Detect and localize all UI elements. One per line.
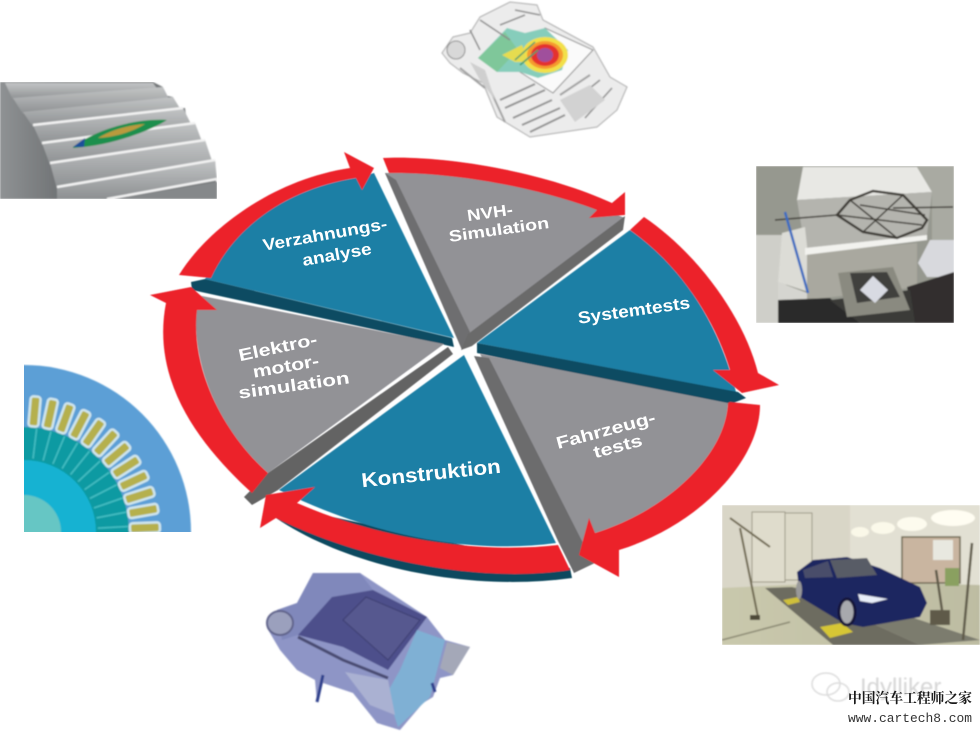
wheel labels: [237, 202, 691, 492]
image: electric drive unit 3D model: [267, 573, 470, 730]
wheel: six segment process cycle: [150, 152, 779, 582]
label: Fahrzeugtests: [554, 408, 658, 462]
label: Systemtests: Systemtests: [577, 293, 691, 328]
label: Fahrzeugtests: Fahrzeug-: [554, 408, 658, 453]
image: NVH simulation housing with heat map: [442, 2, 627, 137]
segment: Konstruktion: [279, 355, 556, 546]
arrow: Konstruktion to Elektromotorsimulation: [260, 487, 570, 574]
segment: Elektromotorsimulation: [196, 295, 453, 505]
image: stator and rotor cross-section: [24, 364, 192, 532]
watermark site name: 中国汽车工程师之家: [848, 690, 972, 706]
segment: Verzahnungsanalyse: [191, 173, 454, 347]
segment: NVH-Simulation: [385, 173, 625, 350]
base shadow under the wheel: [276, 510, 572, 582]
label: Verzahnungsanalyse: analyse: [301, 240, 373, 270]
watermark URL: www.cartech8.com: [848, 712, 972, 726]
image: vehicle test photo with blue car: [722, 505, 980, 645]
arrow: Fahrzeugtests to Konstruktion: [579, 402, 760, 577]
arrow: Elektromotorsimulation to Verzahnungsanalyse: [150, 287, 268, 493]
label: NVH-Simulation: [448, 202, 550, 246]
watermark: [812, 673, 972, 726]
label: NVH-Simulation: Simulation: [448, 215, 550, 246]
label: Elektromotorsimulation: Elektro-: [237, 330, 319, 365]
label: Konstruktion: Konstruktion: [360, 456, 502, 492]
watermark handle: Idylliker: [860, 674, 941, 701]
image: system test rig photo: [756, 166, 954, 323]
arrow: Systemtests to Fahrzeugtests: [630, 217, 779, 393]
arrow: NVH-Simulation to Systemtests: [383, 158, 625, 218]
image: gear tooth contact analysis: [0, 82, 217, 199]
arrow: Verzahnungsanalyse to NVH-Simulation: [179, 152, 374, 278]
label: Fahrzeugtests: tests: [591, 431, 644, 462]
label: Verzahnungsanalyse: Verzahnungs-: [261, 215, 389, 255]
label: Elektromotorsimulation: [237, 330, 351, 403]
segment: Fahrzeugtests: [474, 354, 728, 573]
label: Elektromotorsimulation: motor-: [251, 351, 321, 382]
label: Verzahnungsanalyse: [261, 215, 389, 270]
label: NVH-Simulation: NVH-: [466, 202, 514, 225]
segment: Systemtests: [477, 230, 746, 405]
watermark icon: chat bubbles: [812, 673, 849, 701]
label: Elektromotorsimulation: simulation: [237, 368, 351, 403]
